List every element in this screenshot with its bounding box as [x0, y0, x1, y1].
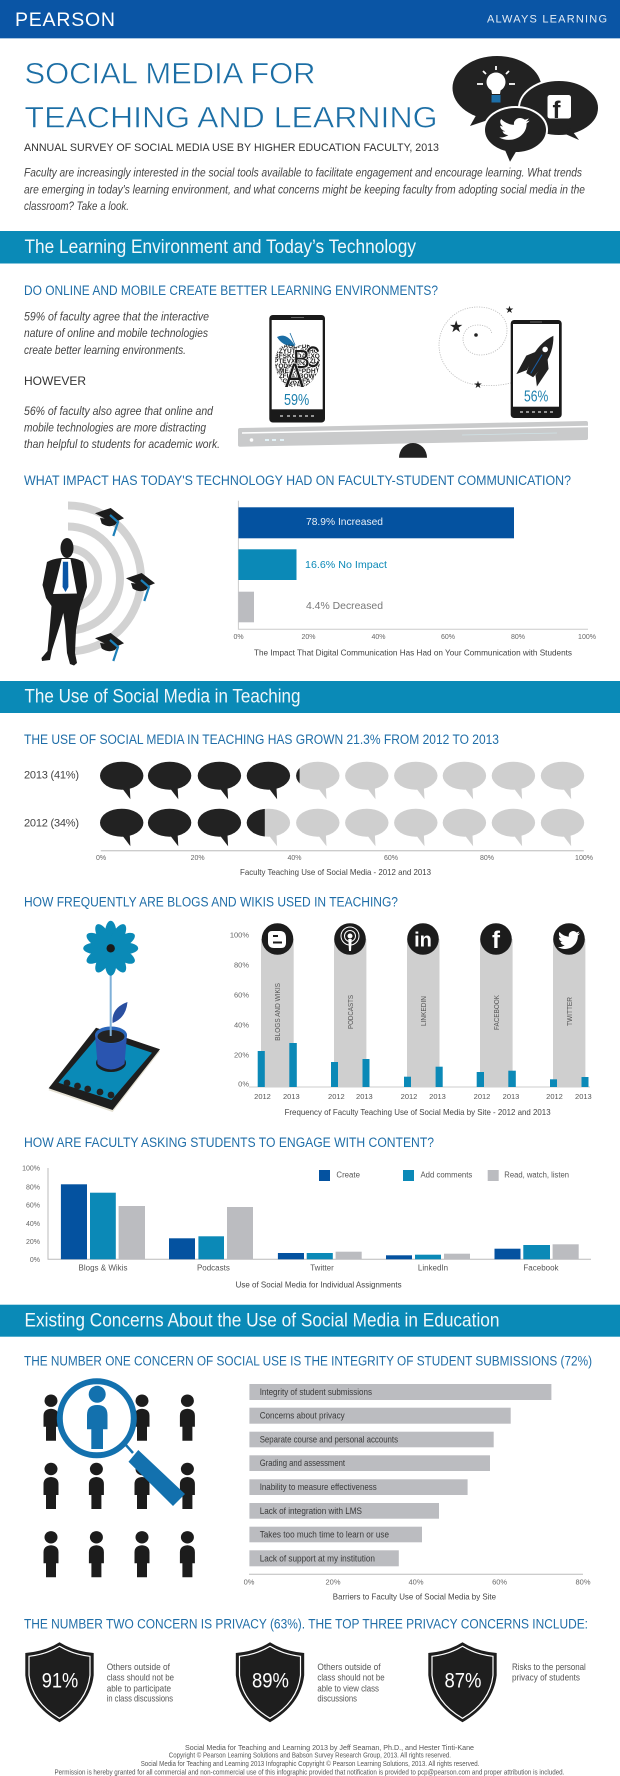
stat: 89% shield: able to view class	[317, 1684, 379, 1694]
footer credits	[54, 1745, 564, 1776]
icon: letter apple: KZFLATBQWSXEF	[274, 373, 332, 380]
illustration: man with signal arcs and graduation caps	[42, 506, 155, 666]
chart caption: Frequency of Faculty Teaching Use of Social Media by Site - 2012 and 2013	[285, 1107, 551, 1117]
column: podcasts: 2012	[328, 1092, 345, 1101]
bar: no impact: 16.6% No Impact	[305, 559, 387, 571]
icon: facebook bubble	[519, 80, 599, 140]
column: podcasts	[328, 923, 373, 1101]
column: facebook: 2012	[474, 1092, 490, 1101]
axis labels: 20%	[26, 1239, 40, 1246]
bar chart: impact on communication	[233, 501, 596, 657]
stat: 91% shield: Others outside of	[107, 1662, 170, 1673]
heading: engage with content: HOW ARE FACULTY ASKING STUDENTS TO ENGAGE WITH CONTENT?	[24, 1135, 434, 1150]
logo: Pearson: PEARSON	[15, 9, 115, 31]
bar: grading: Grading and assessment	[260, 1458, 345, 1468]
icon: letter apple: DKQSTBEGAFXZL	[274, 383, 332, 390]
section banner: use of social media: The Use of Social Media in Teaching	[24, 686, 300, 708]
column: blogs and wikis: 2013	[283, 1092, 300, 1101]
axis labels: 60%	[441, 634, 455, 641]
footer credits: Copyright © Pearson Learning Solutions and Babson Survey Research Group, 2013. All rights reserved.	[169, 1752, 451, 1760]
stat: 89% shield: discussions	[317, 1694, 357, 1705]
illustration: dotted spiral with stars: ★	[505, 305, 514, 316]
bar: separate accounts	[249, 1432, 494, 1447]
column chart: frequency by site	[230, 923, 592, 1117]
bar: privacy	[249, 1408, 511, 1424]
column: podcasts: 2013	[356, 1092, 373, 1101]
icon: letter apple	[275, 332, 320, 387]
bar: support: Lack of support at my institution	[260, 1553, 375, 1563]
bar: time: Takes too much time to learn or use	[260, 1530, 389, 1540]
stat: 87% shield: Risks to the personal	[512, 1662, 586, 1673]
column: twitter: 2012	[546, 1092, 563, 1101]
stat: 91% shield: in class discussions	[107, 1694, 173, 1705]
stat: 59%: 59%	[284, 392, 309, 409]
axis labels: 60%	[26, 1203, 40, 1210]
icon: letter apple: BFSKGDAEXQNMS	[274, 353, 335, 360]
bar: integrity	[249, 1384, 551, 1400]
bar: integrity: Integrity of student submissions	[260, 1387, 372, 1397]
column: linkedin: LINKEDIN	[421, 996, 428, 1026]
icon: letter apple: ESGQKDFAZRTBK	[274, 378, 333, 385]
tagline: ALWAYS LEARNING	[487, 14, 607, 26]
text block: agreement statistics: HOWEVER	[24, 374, 86, 388]
text block: agreement statistics: than helpful to students for academic work.	[24, 439, 220, 451]
text block: agreement statistics	[24, 312, 220, 451]
stat: 87% shield: 87%	[444, 1669, 482, 1693]
heading: faculty-student communication: WHAT IMPACT HAS TODAY'S TECHNOLOGY HAD ON FACULTY-STUDENT COMMUNICATION?	[24, 473, 571, 488]
stat: 91% shield: able to participate	[107, 1684, 171, 1694]
bars: linkedin: LinkedIn	[418, 1264, 448, 1273]
icon: crowd	[44, 1394, 195, 1577]
axis labels: 60%	[492, 1577, 507, 1586]
axis labels	[96, 855, 593, 862]
column: facebook: FACEBOOK	[494, 995, 501, 1030]
axis labels: 40%	[234, 1021, 249, 1030]
axis labels: 40%	[287, 855, 302, 862]
column: twitter	[546, 923, 592, 1101]
axis labels: 20%	[234, 1051, 249, 1060]
axis labels: 40%	[408, 1577, 424, 1586]
axis labels: 20%	[325, 1577, 341, 1586]
stat: 89% shield: class should not be	[317, 1673, 385, 1684]
column: podcasts: PODCASTS	[348, 995, 355, 1029]
icon: graduation cap bottom	[95, 633, 124, 661]
icon: speech bubbles	[452, 56, 599, 162]
column: twitter: 2013	[575, 1092, 592, 1101]
bar: decreased: 4.4% Decreased	[306, 600, 383, 612]
section banner: use of social media	[0, 681, 620, 713]
column: blogs and wikis	[254, 923, 300, 1101]
chart caption: The Impact That Digital Communication Has Had on Your Communication with Students	[254, 647, 572, 657]
illustration: flower growing from tablet	[49, 921, 160, 1112]
heading: blogs and wikis: HOW FREQUENTLY ARE BLOGS AND WIKIS USED IN TEACHING?	[24, 895, 398, 910]
illustration: dotted spiral with stars: ★	[474, 380, 482, 391]
bar: LMS	[249, 1503, 439, 1519]
bar: decreased	[238, 592, 383, 622]
stat: 89% shield: 89%	[252, 1669, 289, 1693]
bars: facebook: Facebook	[523, 1264, 560, 1273]
axis labels: 60%	[234, 991, 249, 1000]
bar: increased	[238, 507, 514, 538]
header bar	[0, 0, 620, 39]
bar: grading	[249, 1455, 490, 1471]
axis labels	[244, 1577, 591, 1586]
intro text	[24, 168, 585, 213]
axis labels: 60%	[384, 855, 398, 862]
column: twitter: TWITTER	[567, 997, 574, 1026]
text block: agreement statistics: nature of online and mobile technologies	[24, 328, 208, 340]
axis labels: 100%	[578, 634, 596, 641]
icon: tablet	[49, 1028, 160, 1112]
axis labels: 80%	[234, 961, 249, 970]
legend	[319, 1170, 569, 1181]
axis labels: 100%	[22, 1166, 40, 1173]
icon: graduation cap top	[95, 508, 124, 536]
chart caption: Faculty Teaching Use of Social Media - 2012 and 2013	[240, 867, 431, 877]
stat: 91% shield: 91%	[42, 1669, 78, 1693]
bars: blogs and wikis	[61, 1184, 145, 1273]
footer credits: Social Media for Teaching and Learning 2013 Infographic Copyright © Pearson Learning Solutions, 2013. All rights reserved.	[141, 1760, 479, 1768]
column: linkedin: 2013	[429, 1092, 446, 1101]
heading: growth: THE USE OF SOCIAL MEDIA IN TEACHING HAS GROWN 21.3% FROM 2012 TO 2013	[24, 732, 499, 747]
icon: letter apple: C	[305, 341, 320, 374]
axis labels: 0%	[238, 1080, 249, 1089]
axis labels: 80%	[480, 855, 494, 862]
bar chart: barriers	[244, 1384, 591, 1601]
bars: podcasts	[169, 1207, 253, 1273]
axis labels: 100%	[575, 855, 593, 862]
legend: Add comments	[420, 1171, 472, 1180]
legend: Create	[336, 1171, 361, 1180]
section banner: learning environment: The Learning Environment and Today’s Technology	[24, 236, 416, 258]
bar: effectiveness: Inability to measure effectiveness	[260, 1482, 377, 1492]
bars: twitter	[278, 1252, 362, 1273]
illustration: dotted spiral with stars: ★	[449, 319, 463, 336]
axis labels: 0%	[244, 1577, 255, 1586]
stat: 89% shield: Others outside of	[317, 1662, 381, 1673]
text block: agreement statistics: create better learning environments.	[24, 345, 186, 357]
axis labels: 80%	[575, 1577, 591, 1586]
bars: facebook	[494, 1244, 579, 1273]
subtitle: ANNUAL SURVEY OF SOCIAL MEDIA USE BY HIGHER EDUCATION FACULTY, 2013	[24, 142, 439, 154]
stat: 91% shield	[25, 1642, 174, 1722]
row: 2012	[24, 809, 584, 846]
axis labels: 40%	[371, 634, 386, 641]
icon: letter apple: A	[285, 357, 304, 395]
axis labels: 100%	[230, 931, 249, 940]
axis labels: 0%	[233, 634, 244, 641]
bars: podcasts: Podcasts	[197, 1264, 230, 1273]
icon: letter apple: B	[293, 344, 310, 374]
stat: 56%: 56%	[524, 389, 548, 406]
footer credits: Social Media for Teaching and Learning 2013 by Jeff Seaman, Ph.D., and Hester Tinti-Kane	[185, 1745, 474, 1752]
bar: support	[249, 1550, 399, 1566]
icon: stem and leaf	[111, 975, 128, 1036]
illustration: seesaw	[238, 421, 588, 458]
legend: Read, watch, listen	[504, 1171, 569, 1180]
text block: agreement statistics: mobile technologies are more distracting	[24, 423, 207, 435]
illustration: right phone 56%	[511, 320, 565, 418]
title: SOCIAL MEDIA FOR	[24, 57, 316, 90]
row: 2013	[24, 762, 584, 799]
axis labels: 0%	[96, 855, 106, 862]
illustration: people under magnifying glass	[44, 1381, 195, 1577]
axis labels	[233, 634, 596, 641]
title: TEACHING AND LEARNING	[24, 101, 437, 134]
heading: online and mobile: DO ONLINE AND MOBILE CREATE BETTER LEARNING ENVIRONMENTS?	[24, 283, 438, 298]
axis labels	[230, 931, 249, 1089]
chart caption: Barriers to Faculty Use of Social Media by Site	[333, 1591, 496, 1601]
icon: pot	[95, 1026, 127, 1072]
intro text: classroom? Take a look.	[24, 201, 129, 213]
bar: privacy: Concerns about privacy	[260, 1411, 345, 1421]
section banner: existing concerns	[0, 1305, 620, 1337]
bar: no impact	[238, 549, 387, 580]
stat: 87% shield: privacy of students	[512, 1673, 580, 1684]
icon: highlighted person	[87, 1386, 108, 1449]
bar: increased: 78.9% Increased	[306, 516, 383, 528]
axis labels: 0%	[30, 1257, 40, 1264]
title	[24, 57, 437, 134]
bar: effectiveness	[249, 1479, 468, 1495]
axis labels: 20%	[191, 855, 205, 862]
icon: rocket	[515, 329, 565, 387]
section banner: learning environment	[0, 231, 620, 264]
column: blogs and wikis: 2012	[254, 1092, 271, 1101]
text block: agreement statistics: 59% of faculty agree that the interactive	[24, 312, 209, 324]
bar: time	[249, 1527, 422, 1542]
column: linkedin	[401, 923, 446, 1101]
chart caption: Use of Social Media for Individual Assignments	[236, 1279, 402, 1289]
icon: letter apple: YQDKNSAGFRBOE	[274, 363, 335, 370]
stat: 87% shield	[428, 1642, 586, 1722]
column: linkedin: in	[414, 930, 432, 952]
column: facebook	[474, 923, 519, 1101]
icon: twitter bubble	[484, 107, 547, 162]
row: 2013: 2013 (41%)	[24, 770, 79, 782]
bars: twitter: Twitter	[310, 1264, 334, 1273]
icon: letter apple: PTEVXHQAZLKFD	[274, 358, 331, 365]
bars: linkedin	[386, 1254, 470, 1273]
column: facebook: 2013	[503, 1092, 519, 1101]
axis labels: 80%	[511, 634, 525, 641]
illustration: dotted spiral with stars	[439, 305, 520, 391]
bars: blogs and wikis: Blogs & Wikis	[79, 1264, 127, 1273]
pictogram chart: speech bubbles 2012 and 2013	[24, 762, 593, 877]
axis labels	[22, 1166, 40, 1264]
bar: LMS: Lack of integration with LMS	[260, 1506, 362, 1516]
illustration: left phone 59%	[269, 315, 325, 422]
row: 2012: 2012 (34%)	[24, 818, 79, 830]
icon: bulb bubble	[452, 56, 542, 126]
icon: flower head	[83, 921, 138, 976]
icon: letter apple: RZYUTLOPHCKGQ	[274, 348, 333, 355]
axis labels: 80%	[26, 1184, 40, 1191]
icon: man	[42, 538, 87, 666]
axis labels: 40%	[26, 1221, 40, 1228]
text block: agreement statistics: 56% of faculty also agree that online and	[24, 406, 214, 418]
stat: 91% shield: class should not be	[107, 1673, 174, 1684]
icon: letter apple: GMEAXFPDHTKSA	[274, 368, 334, 375]
bar: separate accounts: Separate course and personal accounts	[260, 1434, 398, 1444]
column: linkedin: 2012	[401, 1092, 417, 1101]
axis labels: 20%	[301, 634, 316, 641]
column: blogs and wikis: BLOGS AND WIKIS	[275, 983, 282, 1041]
bar chart: individual assignments	[22, 1166, 591, 1289]
icon: facebook bubble: f	[552, 97, 562, 124]
section banner: existing concerns: Existing Concerns About the Use of Social Media in Education	[24, 1310, 500, 1332]
icon: letter apple: GXAGBFDKEQSAF	[274, 343, 334, 350]
column: facebook: f	[492, 927, 501, 954]
stat: 89% shield	[236, 1642, 385, 1722]
icon: graduation cap middle	[126, 573, 155, 601]
icon: magnifying glass	[60, 1381, 185, 1506]
